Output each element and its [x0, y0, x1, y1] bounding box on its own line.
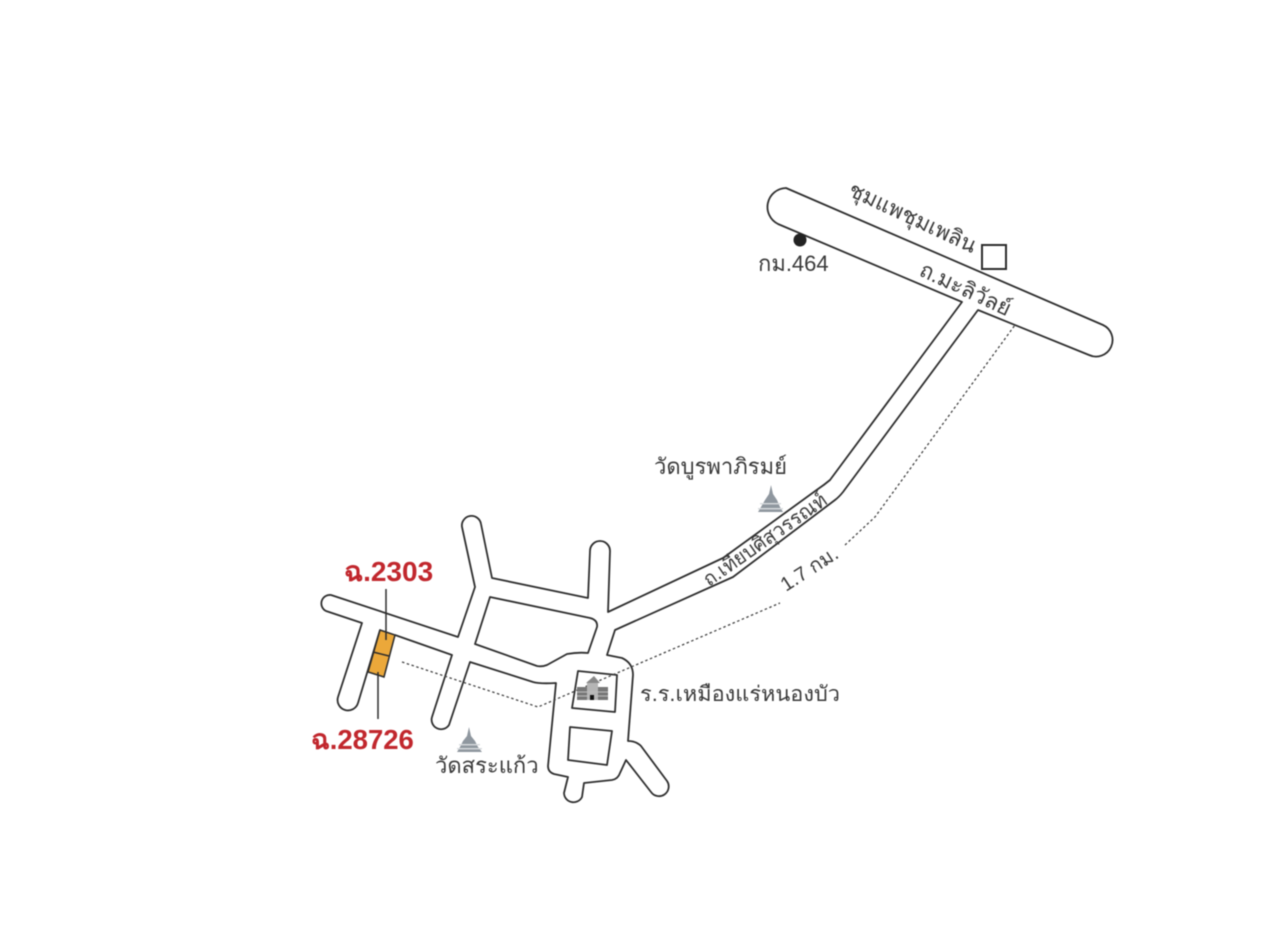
leader line: lower deed	[377, 672, 379, 719]
label: temple upper: วัดบูรพาภิรมย์	[654, 454, 787, 480]
leader line: upper deed	[385, 589, 387, 640]
inner block	[475, 597, 597, 666]
plot of land	[368, 630, 395, 677]
label: road name upper: ถ.มะลิวัลย์	[916, 257, 1015, 321]
destination marker square	[982, 245, 1006, 269]
lower block	[568, 727, 612, 765]
km marker dot	[794, 234, 806, 246]
label: temple lower: วัดสระแก้ว	[435, 753, 539, 778]
distance dotted line	[402, 325, 1015, 707]
school block	[572, 671, 617, 712]
label: deed 2303: ฉ.2303	[344, 556, 433, 587]
road network outline	[321, 188, 1113, 802]
icon: school	[577, 676, 608, 700]
label: road name lower: ถ.เทียบศิสุวรรณท์	[699, 489, 832, 592]
label: deed 28726: ฉ.28726	[311, 724, 414, 755]
icon: temple upper	[758, 485, 783, 512]
label: school: ร.ร.เหมืองแร่หนองบัว	[640, 683, 840, 706]
label: km 464: กม.464	[758, 251, 829, 276]
label: distance: 1.7 กม.	[777, 543, 843, 596]
icon: temple lower	[457, 727, 482, 752]
label: top community: ชุมแพชุมเพลิน	[844, 177, 981, 259]
